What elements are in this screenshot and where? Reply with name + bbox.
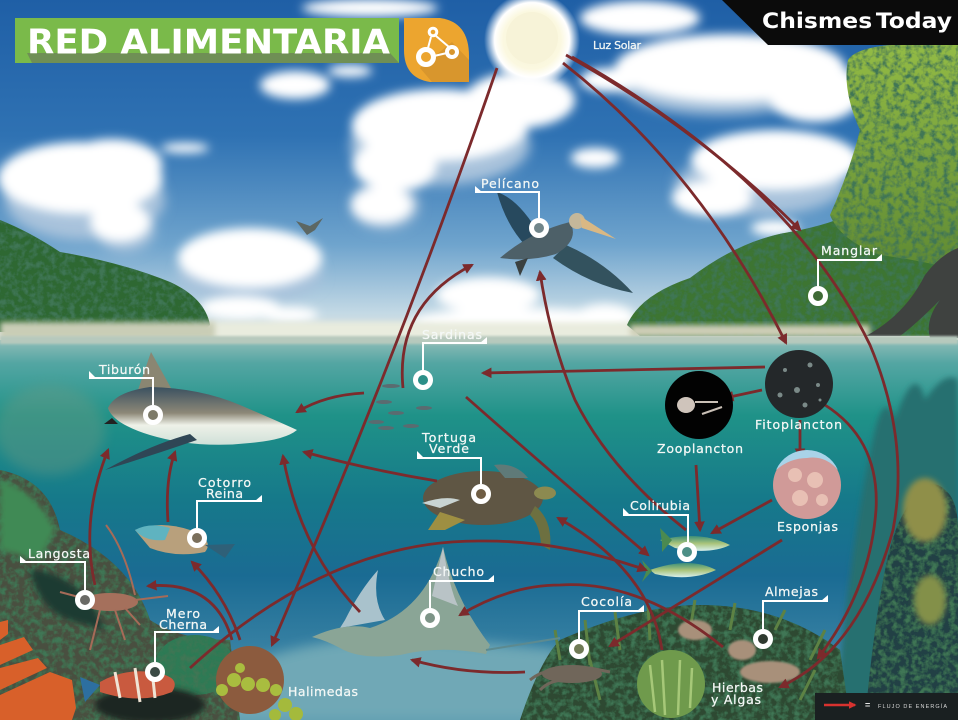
left reef and gorgonian (0, 385, 240, 720)
zooplancton circle (657, 371, 743, 456)
lobster (60, 525, 168, 650)
island right mangrove (627, 210, 958, 337)
grouper mero cherna (80, 668, 175, 702)
node: Manglar (810, 243, 882, 304)
top right brand tag: Chismes Today (762, 9, 952, 33)
title banner: RED ALIMENTARIA (27, 22, 391, 62)
esponjas circle (773, 450, 841, 534)
crab cocolia (530, 665, 610, 690)
node: Colirubia (623, 498, 694, 560)
mangrove roots (866, 248, 958, 338)
node: Pelicano (475, 176, 546, 236)
sardines school (368, 384, 432, 430)
water surface band (0, 336, 958, 344)
tree foliage top right (830, 43, 958, 270)
island left mangrove (0, 220, 215, 340)
shark (104, 352, 297, 470)
node: Mero Cherna: Cherna (159, 617, 207, 632)
legend: flujo de energia (824, 700, 947, 710)
node: Chucho (422, 564, 494, 626)
legend: flujo de energia: = (865, 700, 870, 710)
node: Langosta (20, 546, 92, 608)
legend: flujo de energia: FLUJO DE ENERGÍA (878, 703, 947, 710)
legend background (815, 693, 958, 720)
colirubia fish (642, 528, 730, 582)
halimedas circle: Halimedas (288, 684, 358, 699)
sun (484, 0, 580, 88)
node: Tortuga Verde: Tortuga (421, 430, 476, 445)
node: Almejas (756, 584, 828, 646)
hierbas y algas circle: Hierbas (712, 680, 763, 695)
clouds (0, 0, 863, 336)
almejas shells (678, 620, 800, 683)
node: Colirubia: Colirubia (630, 498, 690, 513)
small distant bird (296, 218, 323, 235)
node: Chucho: Chucho (433, 564, 484, 579)
node: Cocolia (572, 594, 644, 656)
hierbas y algas circle (637, 650, 763, 718)
sea background (0, 340, 958, 720)
energy flow arrows (90, 55, 898, 687)
node: Sardinas: Sardinas (422, 327, 482, 342)
esponjas circle: Esponjas (777, 519, 838, 534)
turtle (422, 465, 556, 550)
sandy sea floor (190, 638, 560, 720)
fitoplancton circle: Fitoplancton (755, 417, 842, 432)
node: Tortuga Verde: Verde (429, 441, 469, 456)
parrotfish cotorro (135, 525, 235, 558)
node: Cotorro Reina (190, 475, 262, 546)
fitoplancton circle (755, 350, 842, 432)
label: Luz Solar: Luz Solar (593, 39, 641, 52)
node: Sardinas (416, 327, 487, 388)
node: Cocolia: Cocolía (581, 594, 632, 609)
zooplancton circle: Zooplancton (657, 441, 743, 456)
node: Manglar: Manglar (821, 243, 878, 258)
node: Mero Cherna: Mero (166, 606, 200, 621)
stingray chucho (312, 547, 560, 656)
hierbas y algas circle: y Algas (711, 692, 761, 707)
node: Tiburon (89, 362, 160, 422)
seagrass meadow (520, 600, 850, 720)
pelican (497, 192, 633, 293)
node: Tortuga Verde (417, 430, 488, 502)
node: Mero Cherna (148, 606, 219, 680)
node: Langosta: Langosta (28, 546, 90, 561)
node: Pelicano: Pelícano (481, 176, 539, 191)
right seaweed forest (835, 378, 958, 720)
horizon mist (190, 322, 660, 342)
halimedas circle (216, 646, 358, 720)
orange sponge coral (0, 620, 76, 720)
node: Almejas: Almejas (765, 584, 818, 599)
node: Tiburon: Tiburón (98, 362, 150, 377)
top right brand tag (722, 0, 958, 45)
icon: network leaf (404, 18, 469, 82)
node: Cotorro Reina: Reina (206, 486, 243, 501)
sky background (0, 0, 958, 340)
node: Cotorro Reina: Cotorro (198, 475, 251, 490)
cloud shading (5, 55, 845, 303)
